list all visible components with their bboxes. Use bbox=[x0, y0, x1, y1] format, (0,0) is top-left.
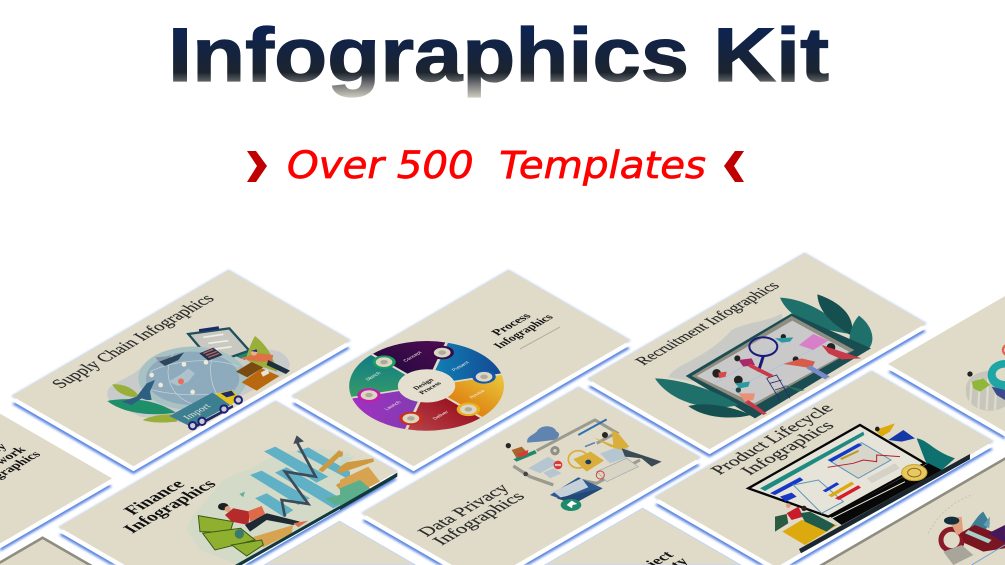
panel: finance card bbox=[59, 401, 397, 565]
panel: lower right card (partial) bbox=[819, 457, 1005, 565]
panel: framework card (partial) bbox=[0, 414, 112, 552]
card heading: Infographics bbox=[428, 489, 529, 548]
illustration: coin stacks bbox=[340, 451, 397, 510]
panel: right gears card (partial) bbox=[888, 296, 1005, 440]
card heading: Finance bbox=[119, 477, 189, 517]
panel: recruitment card bbox=[588, 253, 926, 457]
panel: data privacy card bbox=[362, 387, 700, 565]
panel: lower middle card (partial) bbox=[264, 521, 415, 565]
panel: lower left card (partial) bbox=[0, 536, 92, 565]
panel: supply chain card bbox=[12, 270, 350, 474]
card heading: Supply Chain Infographics bbox=[47, 291, 219, 391]
card heading bbox=[641, 548, 693, 565]
card heading: Recruitment Infographics bbox=[631, 279, 784, 368]
illustration: tablet with recruiters bbox=[655, 294, 872, 418]
chart: design process wheel: Sketch bbox=[364, 371, 383, 382]
card heading: Infographics bbox=[736, 418, 838, 478]
card heading: Product Lifecycle bbox=[706, 401, 838, 477]
chart: design process wheel: Deliver bbox=[432, 410, 451, 421]
chart: design process wheel: Launch bbox=[383, 400, 403, 412]
card heading: Infographics bbox=[490, 312, 557, 350]
illustration: gears and team bbox=[966, 344, 1005, 411]
card heading: Process bbox=[488, 311, 534, 338]
panel: project card (partial) bbox=[545, 508, 741, 565]
icon: left chevron bbox=[247, 151, 267, 182]
title: Infographics Kit bbox=[168, 13, 829, 98]
subtitle text: Over 500 Templates bbox=[287, 144, 706, 187]
panel: product lifecycle card bbox=[655, 371, 993, 565]
icon: right chevron bbox=[724, 151, 744, 182]
panel: process card bbox=[292, 270, 630, 474]
illustration: data security bbox=[506, 419, 662, 511]
card heading: Infographics bbox=[119, 477, 220, 536]
chart: design process wheel: Process bbox=[417, 380, 444, 396]
illustration: globe logistics bbox=[107, 326, 290, 429]
chart: design process wheel: Design bbox=[411, 377, 436, 391]
chart: design process wheel: Concept bbox=[402, 350, 424, 363]
chart: design process wheel bbox=[317, 323, 536, 449]
illustration: person with gear bbox=[928, 495, 1005, 565]
illustration: investor with rising chart bbox=[187, 435, 350, 565]
truck label text: Import bbox=[181, 402, 214, 422]
card heading: Data Privacy bbox=[413, 481, 514, 539]
subtitle banner bbox=[247, 144, 744, 187]
illustration: dashboard monitor bbox=[748, 423, 970, 553]
chart: design process wheel: Present bbox=[451, 360, 472, 372]
chart: design process wheel: Revise bbox=[468, 389, 487, 400]
